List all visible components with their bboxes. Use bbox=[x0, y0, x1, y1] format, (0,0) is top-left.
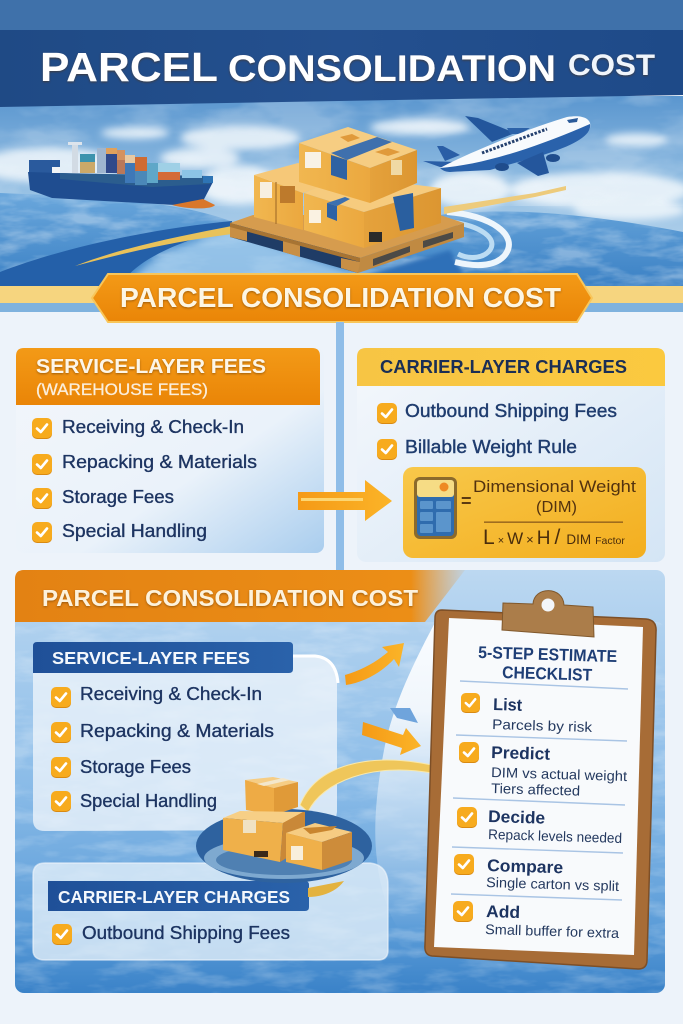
panel: service-layer fees (warehouse): Receiving & Check-In bbox=[62, 417, 244, 437]
title: COST bbox=[568, 49, 655, 82]
cloud texture bbox=[0, 96, 683, 206]
box bbox=[223, 811, 303, 862]
sub-panel header: CARRIER-LAYER CHARGES bbox=[58, 887, 290, 907]
hero illustration: sea, sky, ship, pallet and plane bbox=[0, 96, 683, 288]
panel: lower section bbox=[15, 570, 665, 993]
step 3: decide bbox=[457, 807, 622, 846]
icon: calculator bbox=[414, 477, 457, 539]
title bbox=[40, 44, 655, 90]
sub-panel header bbox=[48, 881, 309, 911]
clouds bbox=[0, 119, 683, 220]
title band bbox=[0, 30, 683, 107]
step 3: decide: Repack levels needed bbox=[488, 826, 622, 846]
dimensional weight formula box bbox=[403, 467, 646, 558]
lower right box bbox=[304, 176, 441, 212]
icon: pallet with stacked boxes bbox=[230, 127, 464, 273]
dimensional weight formula box: = bbox=[461, 491, 472, 511]
step 4: compare: Single carton vs split bbox=[486, 874, 619, 894]
paper sheet bbox=[434, 618, 643, 955]
panel: service-layer fees (warehouse): Special Handling bbox=[62, 521, 207, 541]
step 4: compare bbox=[454, 854, 619, 894]
gold trail left bbox=[75, 226, 232, 266]
panel header: SERVICE-LAYER FEES bbox=[36, 356, 266, 378]
section header bbox=[15, 570, 465, 622]
dimensional weight formula box: L ×W×H/ DIM Factor bbox=[483, 526, 625, 549]
sub-panel: service-layer fees: Storage Fees bbox=[80, 757, 191, 777]
checklist title bbox=[478, 643, 617, 685]
step 1: list: Parcels by risk bbox=[492, 716, 593, 735]
box bbox=[245, 777, 305, 855]
step 5: add bbox=[453, 901, 620, 941]
top strip bbox=[0, 0, 683, 32]
dimensional weight formula box: Dimensional Weight bbox=[473, 477, 636, 496]
arrow: service to carrier bbox=[298, 480, 392, 521]
small blue flag bbox=[390, 708, 418, 723]
gold trail right bbox=[444, 186, 566, 214]
step 1: list bbox=[461, 693, 593, 735]
parcels on platform bbox=[196, 777, 372, 883]
ocean bbox=[0, 193, 683, 288]
sub-panel: carrier-layer charges: Outbound Shipping Fees bbox=[82, 923, 290, 943]
metal clip bbox=[502, 591, 594, 637]
sub-panel: service-layer fees bbox=[33, 642, 338, 831]
sub-panel: service-layer fees: Receiving & Check-In bbox=[80, 684, 262, 704]
step 2: predict: Tiers affected bbox=[491, 780, 580, 799]
title: CONSOLIDATION bbox=[228, 48, 556, 89]
sky backdrop bbox=[0, 96, 683, 288]
back left box bbox=[254, 163, 340, 193]
panel header: (WAREHOUSE FEES) bbox=[36, 380, 208, 399]
clipboard checklist bbox=[425, 591, 656, 969]
arrow: up right bbox=[345, 643, 404, 685]
title: PARCEL bbox=[40, 44, 218, 90]
panel header bbox=[16, 348, 320, 405]
gold arc from platform to clipboard bbox=[300, 760, 432, 897]
panel: service-layer fees (warehouse): Storage Fees bbox=[62, 487, 174, 507]
step 5: add: Small buffer for extra bbox=[485, 921, 620, 941]
step 2: predict: Predict bbox=[491, 743, 551, 764]
icon: container ship bbox=[28, 142, 215, 208]
sub-panel header: SERVICE-LAYER FEES bbox=[52, 648, 250, 668]
icon: airplane bbox=[423, 116, 590, 176]
blue ribbon strip bbox=[0, 303, 683, 312]
step 5: add: Add bbox=[486, 902, 520, 922]
step 4: compare: Compare bbox=[487, 856, 563, 877]
dark blue arc of globe bbox=[0, 221, 232, 288]
checklist title: 5-STEP ESTIMATE bbox=[478, 643, 617, 666]
banner bbox=[92, 274, 592, 322]
sub-panel header bbox=[33, 642, 293, 673]
arrow: right bbox=[362, 722, 421, 755]
panel header bbox=[357, 348, 665, 386]
panel: service-layer fees (warehouse) bbox=[16, 348, 324, 553]
light wedge behind clipboard bbox=[375, 617, 440, 930]
water texture bbox=[15, 622, 665, 993]
section header: PARCEL CONSOLIDATION COST bbox=[42, 585, 418, 611]
panel: carrier-layer charges: Billable Weight Rule bbox=[405, 437, 577, 457]
white swirl bbox=[447, 212, 509, 265]
dimensional weight formula box: (DIM) bbox=[536, 499, 577, 516]
step 2: predict bbox=[459, 742, 627, 799]
pallet bbox=[230, 215, 464, 258]
light sea inside arc bbox=[120, 230, 480, 288]
panel header: CARRIER-LAYER CHARGES bbox=[380, 356, 627, 377]
dark water right of pallet bbox=[362, 250, 470, 285]
panel: service-layer fees (warehouse): Repacking & Materials bbox=[62, 452, 257, 472]
box bbox=[286, 823, 352, 870]
foam texture bbox=[0, 193, 683, 288]
panel: carrier-layer charges: Outbound Shipping Fees bbox=[405, 401, 617, 421]
sub-panel: service-layer fees: Repacking & Materials bbox=[80, 721, 274, 741]
checklist title: CHECKLIST bbox=[502, 663, 593, 685]
sub-panel: carrier-layer charges bbox=[33, 863, 388, 960]
sub-panel: service-layer fees: Special Handling bbox=[80, 791, 217, 811]
gold ribbon bbox=[0, 286, 683, 303]
step 2: predict: DIM vs actual weight bbox=[491, 764, 627, 784]
banner: PARCEL CONSOLIDATION COST bbox=[120, 282, 561, 313]
upper box bbox=[299, 127, 417, 168]
step 1: list: List bbox=[493, 695, 523, 715]
vertical divider bbox=[336, 322, 344, 570]
clipboard board bbox=[425, 610, 656, 969]
panel: carrier-layer charges bbox=[357, 348, 665, 562]
step 3: decide: Decide bbox=[488, 807, 545, 828]
